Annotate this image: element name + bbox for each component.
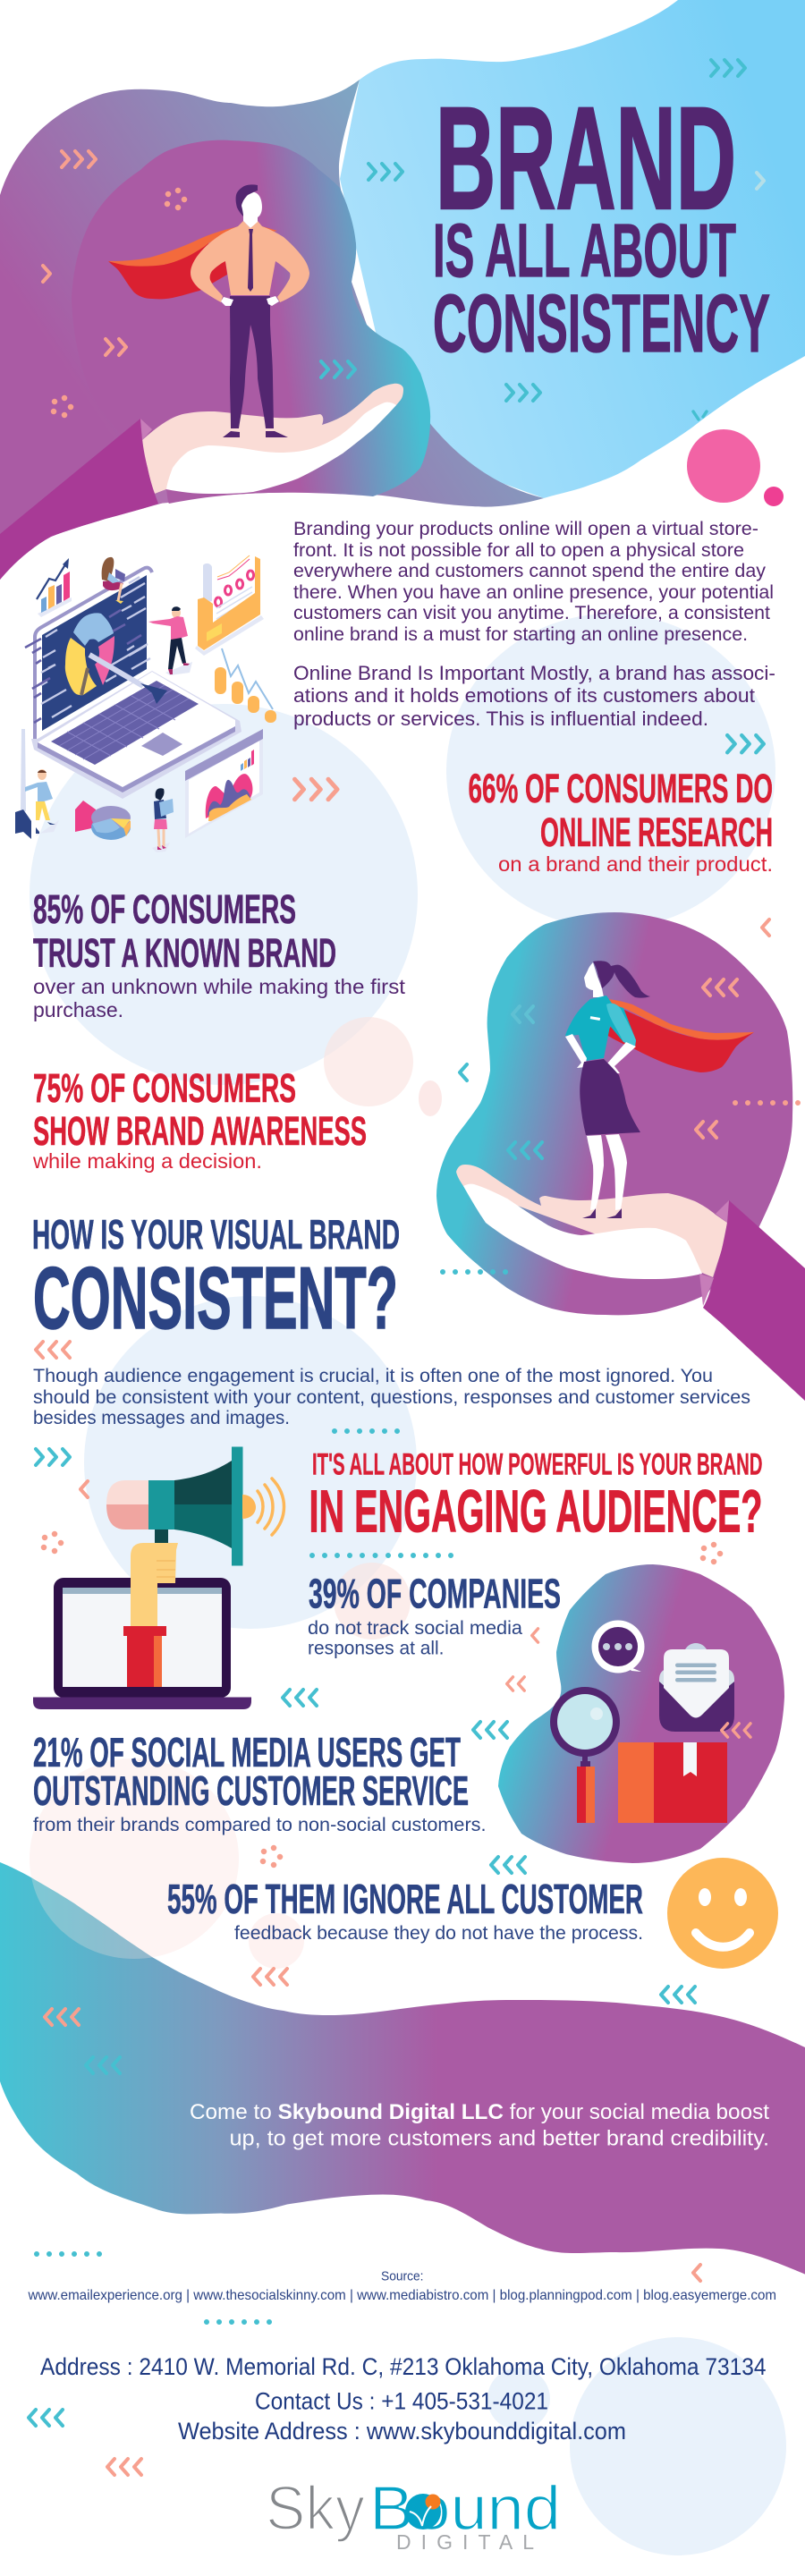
- chevron salmon above wave: [253, 1969, 287, 1985]
- chevron salmon: [532, 1629, 538, 1642]
- intro paragraph 1: everywhere and customers cannot spend the entire day: [293, 561, 767, 581]
- chevron teal triple: [508, 1142, 542, 1158]
- cape red: [606, 1004, 754, 1072]
- stat caption: feedback because they do not have the process.: [234, 1923, 643, 1944]
- laptop base: [33, 1698, 251, 1709]
- sleeve dark: [703, 1200, 805, 1401]
- heading line 1: HOW IS YOUR VISUAL BRAND: [32, 1211, 400, 1258]
- intro paragraph 2: Online Brand Is Important Mostly, a brand has associ-: [293, 662, 775, 684]
- background circle: pale blue footer: [570, 2337, 786, 2555]
- chevron teal above stat: [727, 735, 764, 752]
- dot cluster low: [54, 398, 71, 415]
- woman panel chevrons and dots: [443, 919, 798, 1272]
- logo word Bound: Bound: [369, 2473, 561, 2543]
- stat: 21 percent: [33, 1729, 487, 1835]
- code lines on screen: [41, 577, 150, 717]
- dot cluster left: [44, 1534, 61, 1551]
- cape red: [108, 243, 227, 299]
- chevron teal: [661, 1987, 695, 2003]
- keyboard keys: [59, 685, 189, 759]
- woman with laptop: [152, 788, 174, 852]
- pink circle large: [687, 429, 760, 503]
- stat heading: 75% OF CONSUMERS: [33, 1065, 296, 1111]
- megaphone handle: [155, 1530, 168, 1553]
- logo: SkyBound Digital: [266, 2473, 561, 2554]
- icon: magnifier: [550, 1687, 620, 1823]
- dots teal: [335, 1430, 397, 1432]
- bar chart with arrow: [37, 558, 72, 617]
- chevron salmon single top: [762, 919, 769, 936]
- stat: 39 percent: [308, 1571, 561, 1658]
- pink circle small: [764, 487, 784, 506]
- chevron teal under title: [506, 385, 540, 401]
- background circle: pink lower left: [30, 1758, 239, 1959]
- megaphone band: [148, 1480, 174, 1530]
- background circle: pale blue megaphone: [84, 1296, 417, 1629]
- icon: gift box: [618, 1742, 727, 1823]
- stat: 75 percent: [32, 1065, 367, 1173]
- title: [433, 76, 770, 369]
- dots salmon: [735, 1102, 798, 1104]
- laptop base: [38, 672, 235, 787]
- logo word Sky: Sky: [266, 2473, 365, 2543]
- sleeve fold: [140, 419, 152, 440]
- megaphone back lower: [106, 1504, 148, 1530]
- icon: chat bubble: [592, 1621, 644, 1673]
- stat heading: TRUST A KNOWN BRAND: [33, 930, 336, 976]
- intro paragraph 1: Branding your products online will open a virtual store-: [293, 519, 758, 539]
- engagement chevrons and dots: [36, 1431, 720, 1873]
- mouse pointer: [89, 655, 167, 704]
- hero chevrons and dots: [43, 60, 764, 415]
- cuff: [123, 1626, 166, 1636]
- shirt and arms: [191, 221, 309, 302]
- hair: [236, 184, 258, 216]
- hand white palm: [166, 402, 396, 494]
- icon: megaphone on laptop: [33, 1447, 284, 1709]
- hero: hand: [142, 384, 403, 494]
- arms: [565, 1034, 636, 1073]
- stat heading: 39% OF COMPANIES: [309, 1571, 561, 1617]
- chevron salmon double: [696, 1122, 716, 1138]
- heading line 2: CONSISTENT?: [33, 1249, 398, 1347]
- stat: 66 percent: [469, 766, 773, 876]
- neck and face: [242, 191, 262, 228]
- finger lines: [157, 1561, 175, 1577]
- hero: partly hidden chevron: [693, 411, 707, 419]
- chevron teal: [491, 1857, 525, 1873]
- chevron teal: [283, 1690, 317, 1706]
- stat heading: [469, 766, 773, 855]
- orange behind collar: [262, 226, 277, 233]
- visual brand paragraph: besides messages and images.: [33, 1408, 290, 1428]
- background circle: pale blue left: [30, 704, 418, 1085]
- source: [28, 2268, 776, 2303]
- logo solid o: [405, 2494, 441, 2529]
- hands: [221, 296, 279, 306]
- pale circle overlapping wave: [31, 1878, 152, 1959]
- laptop screen: [63, 1588, 222, 1687]
- chevron salmon double: [106, 339, 126, 355]
- chevron teal: [29, 2410, 63, 2426]
- woman panel gradient blob: [436, 912, 792, 1315]
- contact details: [40, 2353, 766, 2445]
- background circle: pale blue footer small: [487, 2368, 550, 2430]
- cuff below hand: [155, 489, 168, 504]
- heels: [582, 1208, 622, 1218]
- superhero woman: [565, 961, 754, 1218]
- stat caption: do not track social media: [308, 1618, 522, 1639]
- intro paragraph 2: [293, 662, 775, 730]
- intro paragraph 1: front. It is not possible for all to open a physical store: [293, 540, 744, 561]
- badge: [590, 1016, 600, 1021]
- call to action: Come to Skybound Digital LLC for your social media boost: [190, 2100, 769, 2124]
- call to action: [190, 2100, 769, 2150]
- stat heading: [33, 1065, 367, 1154]
- illustration: isometric laptop and team: [15, 541, 276, 852]
- chevron salmon under heading: [36, 1342, 70, 1358]
- stat caption: [308, 1618, 522, 1658]
- intro paragraph 2: ations and it holds emotions of its customers about: [293, 684, 755, 707]
- woman on laptop: [102, 557, 125, 604]
- chevron teal single: [460, 1064, 467, 1080]
- hero: sleeve: [0, 419, 168, 580]
- chevron salmon: [45, 2009, 79, 2025]
- 3D pie chart: [75, 801, 131, 840]
- dot cluster right: [703, 1545, 720, 1562]
- chevron salmon triple: [703, 979, 737, 996]
- stat caption: [33, 975, 406, 1021]
- chevron salmon: [107, 2459, 141, 2475]
- background circle: pale pink large: [324, 1017, 413, 1106]
- stat caption: while making a decision.: [32, 1149, 262, 1173]
- stat heading: 21% OF SOCIAL MEDIA USERS GET: [33, 1729, 461, 1775]
- laptop base shadow: [31, 671, 242, 799]
- logo word Digital: DIGITAL: [396, 2530, 534, 2554]
- chevron salmon: [693, 2265, 700, 2281]
- stat caption: purchase.: [33, 998, 123, 1021]
- white palm: [463, 1184, 702, 1279]
- laptop frame: [54, 1578, 231, 1698]
- chevron salmon: [507, 1677, 524, 1690]
- chevron teal: [36, 1449, 70, 1465]
- trousers: [230, 296, 274, 428]
- pie chart on screen: [65, 613, 114, 695]
- heading: engaging audience: [309, 1447, 762, 1546]
- man with flag: [15, 729, 59, 839]
- screen dark lines: [25, 610, 141, 723]
- chevron pale teal: [513, 1006, 533, 1022]
- megaphone horn upper: [174, 1461, 232, 1504]
- hand pink palm: [142, 384, 403, 494]
- sound waves: [242, 1479, 284, 1535]
- intro paragraph 1: there. When you have an online presence, your potential: [293, 582, 774, 603]
- hero: inner gradient blob: [72, 140, 430, 504]
- megaphone horn lower: [174, 1504, 232, 1548]
- visual brand paragraph: should be consistent with your content, questions, responses and customer services: [33, 1387, 750, 1408]
- lower cuff: [699, 1274, 714, 1306]
- background circle: pale blue right: [446, 614, 775, 928]
- sleeve dark: [0, 419, 158, 580]
- sleeve stripe: [154, 1636, 162, 1687]
- stat heading: 85% OF CONSUMERS: [33, 886, 296, 932]
- heading: visual brand: [32, 1211, 400, 1347]
- intro paragraph 2: products or services. This is influential indeed.: [293, 708, 708, 730]
- intro paragraph 1: online brand is a must for starting an online presence.: [293, 624, 748, 645]
- purple blob with icons: [498, 1564, 784, 1863]
- logo check: [410, 2506, 431, 2526]
- stat caption: from their brands compared to non-social customers.: [33, 1815, 487, 1835]
- stat caption: responses at all.: [308, 1639, 444, 1658]
- laptop base edge: [38, 726, 235, 792]
- chevron salmon: [80, 1481, 88, 1497]
- dots teal: [37, 2253, 99, 2255]
- phone: Contact Us : +1 405-531-4021: [255, 2388, 548, 2415]
- arm and fist: [131, 1543, 178, 1627]
- chevron pale teal: [86, 2057, 120, 2073]
- stat: 85 percent: [33, 886, 406, 1021]
- skirt: [580, 1059, 640, 1135]
- face and neck: [584, 962, 604, 997]
- legs: [587, 1134, 627, 1210]
- intro paragraph 1: [293, 519, 774, 645]
- dot cluster: [263, 1848, 280, 1865]
- cape orange edge: [108, 226, 239, 267]
- stat heading: [33, 1729, 469, 1814]
- chevron teal near title: [369, 164, 402, 180]
- hero: purple blob: [0, 80, 544, 580]
- call to action: up, to get more customers and better brand credibility.: [229, 2127, 769, 2150]
- man in pink jacket: [148, 606, 192, 675]
- keyboard: [51, 681, 199, 765]
- hair and ponytail: [593, 961, 650, 998]
- footer chevrons and dots: [29, 1987, 700, 2475]
- folder with report: [195, 541, 264, 656]
- stat caption: over an unknown while making the first: [33, 975, 406, 998]
- chevron salmon single: [43, 266, 50, 282]
- teal sleeve highlight: [606, 1004, 636, 1046]
- screen bar: [63, 1588, 222, 1594]
- hero: superhero man: [108, 184, 309, 437]
- chevron teal top right: [711, 60, 745, 76]
- megaphone back: [106, 1480, 148, 1504]
- dots teal: [443, 1271, 505, 1273]
- pink palm: [456, 1165, 727, 1277]
- icon: smiley face: [667, 1858, 778, 1969]
- shoes: [223, 431, 288, 437]
- logo orange dot: [426, 2494, 440, 2510]
- sleeve: [127, 1636, 162, 1687]
- chevron teal: [473, 1722, 507, 1738]
- stat: 55 percent: [167, 1876, 643, 1944]
- hand holding woman: [456, 1165, 727, 1279]
- chevron teal over blob: [321, 361, 355, 377]
- source list: www.emailexperience.org | www.thesocialskinny.com | www.mediabistro.com | blog.planningpod.com | blog.easyemerge.com: [28, 2288, 776, 2303]
- dots teal row: [312, 1553, 451, 1558]
- background circle: pink behind 39 percent: [334, 1563, 411, 1640]
- visual brand paragraph: [33, 1366, 750, 1428]
- laptop screen: [42, 575, 147, 731]
- cape orange edge: [593, 999, 754, 1040]
- chart window: [185, 729, 263, 838]
- megaphone rim: [232, 1447, 243, 1565]
- stat caption: on a brand and their product.: [498, 852, 773, 876]
- upper cuff: [716, 1200, 729, 1223]
- chevron pale single: [757, 173, 764, 189]
- icon: envelope: [659, 1643, 734, 1732]
- dots teal: [207, 2321, 269, 2323]
- trackpad: [141, 733, 182, 756]
- teal top: [565, 996, 636, 1061]
- visual brand paragraph: Though audience engagement is crucial, it is often one of the most ignored. You: [33, 1366, 713, 1386]
- chevron salmon on blob: [722, 1724, 750, 1737]
- website: Website Address : www.skybounddigital.com: [178, 2418, 626, 2445]
- source label: Source:: [381, 2268, 424, 2284]
- chevron salmon top left: [62, 151, 96, 167]
- bottom gradient wave: [0, 1862, 805, 2275]
- chevron salmon large: [295, 779, 337, 800]
- background circle: pale pink small: [419, 1080, 442, 1116]
- hero: light blue blob: [340, 0, 805, 498]
- coins and falling line: [215, 648, 276, 723]
- background circle: pink lower small: [249, 1913, 304, 1969]
- stat heading: OUTSTANDING CUSTOMER SERVICE: [33, 1767, 469, 1814]
- dot cluster top: [167, 191, 184, 208]
- intro paragraph 1: customers can visit you anytime. Therefore, a consistent: [293, 603, 770, 623]
- stat heading: [33, 886, 336, 976]
- laptop lid frame: [35, 568, 152, 741]
- stat heading: SHOW BRAND AWARENESS: [33, 1108, 367, 1154]
- tie: [248, 229, 253, 292]
- right sleeve: [699, 1200, 805, 1401]
